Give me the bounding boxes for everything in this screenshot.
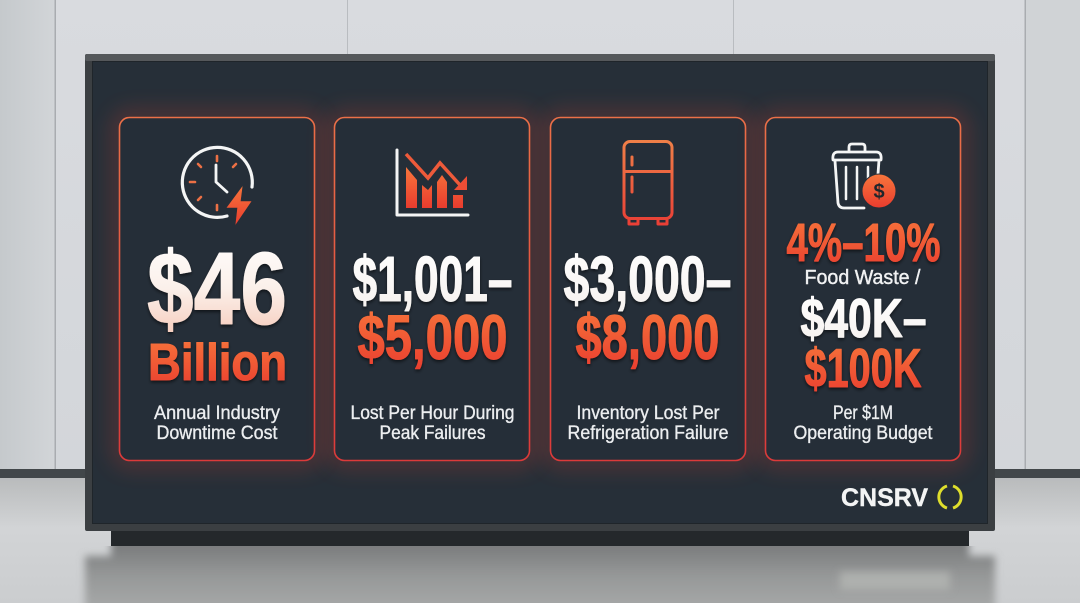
icon: refrigerator	[624, 142, 672, 224]
value: $100K: $100K	[804, 337, 922, 399]
label	[154, 403, 280, 444]
icon: logo ring	[939, 486, 961, 508]
logo: CNSRV: CNSRV	[841, 484, 928, 512]
label: Operating Budget	[794, 423, 933, 444]
label: Peak Failures	[380, 423, 486, 444]
value: $8,000: $8,000	[576, 303, 720, 373]
value: Billion: Billion	[148, 334, 287, 392]
label: food waste: Food Waste /	[804, 267, 921, 289]
label: Inventory Lost Per	[576, 403, 720, 424]
value: $5,000: $5,000	[358, 303, 508, 373]
monitor	[85, 54, 995, 531]
label: Lost Per Hour During	[350, 403, 514, 424]
label	[568, 403, 728, 444]
icon: trash can with dollar coin: $	[873, 181, 885, 203]
label: Downtime Cost	[156, 423, 278, 444]
panel: inventory lost	[550, 117, 746, 461]
label	[794, 403, 933, 444]
icon: falling bar chart	[397, 150, 468, 215]
value: $1,001–: $1,001–	[352, 243, 512, 315]
panel: food waste	[765, 117, 961, 461]
panel: annual downtime cost	[119, 117, 315, 461]
icon: clock with lightning bolt	[182, 147, 252, 226]
monitor stand	[111, 530, 969, 546]
panel: lost per hour	[334, 117, 530, 461]
value: $46: $46	[147, 231, 287, 346]
value: 4%–10%: 4%–10%	[786, 213, 940, 273]
label: Refrigeration Failure	[568, 423, 728, 444]
value: $40K–: $40K–	[800, 287, 926, 349]
label	[350, 403, 514, 444]
value: $3,000–: $3,000–	[564, 243, 732, 315]
icon: trash can with dollar coin	[833, 144, 896, 208]
label: Annual Industry	[154, 403, 280, 424]
label: Per $1M	[833, 403, 893, 424]
